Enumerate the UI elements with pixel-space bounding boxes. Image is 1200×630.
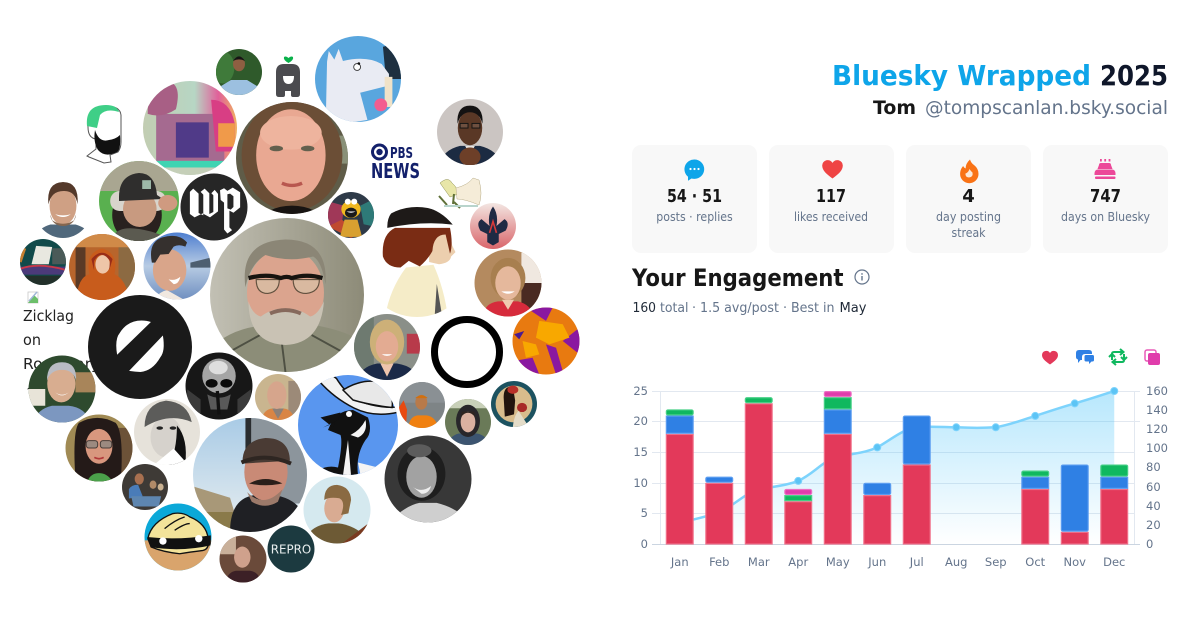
avatar: man with grey hair, black glasses and grey beard xyxy=(210,218,372,372)
avatar: bald man in dark sweater xyxy=(220,536,266,582)
engagement summary: · 1.5 avg/post · Best in xyxy=(692,300,834,316)
avatar: blonde woman in navy blazer xyxy=(354,314,420,380)
avatar: man with glasses and dark suit xyxy=(437,99,503,166)
avatar: black and white portrait with curly hair xyxy=(384,436,472,522)
avatar: black ring xyxy=(434,320,500,384)
icon: birthday cake xyxy=(1094,159,1116,179)
stat card: posting streak: streak xyxy=(952,226,986,240)
broken image alt text: Zicklag: on xyxy=(23,331,41,349)
avatar: black circle with white slash xyxy=(88,295,192,399)
month labels: Feb xyxy=(709,555,729,569)
engagement summary: 160 xyxy=(632,300,656,316)
month labels: Dec xyxy=(1103,555,1125,569)
avatar: men sitting with drinks xyxy=(122,464,168,510)
month labels xyxy=(670,555,1125,569)
engagement summary: total xyxy=(660,300,688,316)
avatar: PBS News logo xyxy=(371,144,420,183)
right axis labels: 80 xyxy=(1146,460,1161,474)
title: Bluesky Wrapped xyxy=(832,59,1091,92)
stat card: posting streak xyxy=(906,145,1031,253)
stat card: days on Bluesky: 747 xyxy=(1090,186,1121,207)
stat card: posts and replies xyxy=(632,145,757,253)
icon: quotes squares xyxy=(1145,350,1160,365)
stat card: posts and replies: 54 · 51 xyxy=(667,186,722,207)
avatar: bald man with beige background xyxy=(255,374,301,420)
avatar: young man in hood xyxy=(445,399,491,445)
avatar: woman with long brown hair xyxy=(236,102,348,214)
icon: info xyxy=(855,270,869,284)
icon: replies bubbles xyxy=(1076,350,1094,364)
avatar: art nouveau woman with red flower xyxy=(491,381,537,427)
avatar: thermal image xyxy=(512,308,580,374)
avatar: smiling man by a lake xyxy=(144,232,210,300)
engagement chart xyxy=(633,384,1168,569)
right axis labels: 160 xyxy=(1146,384,1168,398)
user name and handle: @tompscanlan.bsky.social xyxy=(925,97,1168,119)
month labels: May xyxy=(826,555,850,569)
avatar: Moomin character xyxy=(315,36,401,122)
avatar: Washington Post logo xyxy=(180,174,248,240)
month labels: Jul xyxy=(909,555,924,569)
avatar: grey ghost logo with green sprout xyxy=(276,56,300,97)
broken image alt text: Zicklag: ~ xyxy=(26,379,39,397)
left axis labels xyxy=(633,384,648,551)
avatar cluster xyxy=(20,36,580,582)
avatar: green haired bearded illustration xyxy=(87,105,121,163)
broken image alt text: Zicklag: Zicklag xyxy=(23,307,74,325)
left axis labels: 15 xyxy=(633,445,648,459)
right axis labels: 100 xyxy=(1146,441,1168,455)
left axis labels: 10 xyxy=(633,476,648,490)
avatar: circuit board wiring xyxy=(20,239,66,285)
month labels: Aug xyxy=(945,555,967,569)
month labels: Oct xyxy=(1025,555,1046,569)
month labels: Jun xyxy=(867,555,886,569)
avatar: PBS News logo: PBS xyxy=(390,144,413,162)
left axis labels: 5 xyxy=(641,506,648,520)
right axis labels xyxy=(1146,384,1168,551)
avatar: man in orange by stormy sky xyxy=(399,382,445,428)
avatar: goose in hat illustration xyxy=(298,375,398,475)
month labels: Jan xyxy=(670,555,689,569)
title: 2025 xyxy=(1100,59,1168,92)
avatar: silver skull xyxy=(186,352,252,420)
month labels: Apr xyxy=(788,555,808,569)
stat card: posting streak: day posting xyxy=(936,210,1001,224)
right axis labels: 60 xyxy=(1146,480,1161,494)
stat card: days on Bluesky: days on Bluesky xyxy=(1061,210,1150,224)
stacked bars xyxy=(666,392,1128,544)
icon: reposts arrows xyxy=(1109,349,1127,365)
stat card: likes received: 117 xyxy=(816,186,846,207)
left axis labels: 20 xyxy=(633,414,648,428)
heading: Your Engagement: Your Engagement xyxy=(631,264,844,292)
stat card: likes received: likes received xyxy=(794,210,868,224)
avatar: colorful cartoon bug xyxy=(328,192,374,238)
avatar: PBS News logo: NEWS xyxy=(371,159,420,183)
cumulative area xyxy=(680,391,1114,544)
avatar: black and white woman in beanie and glasses xyxy=(134,399,200,465)
right axis labels: 0 xyxy=(1146,537,1153,551)
icon: flame xyxy=(960,160,978,183)
avatar: illustrated red haired girl in orange hoodie xyxy=(69,234,135,300)
avatar: woman in black cap and headphones xyxy=(99,161,179,243)
left axis labels: 0 xyxy=(641,537,648,551)
avatar: woman with blonde bob and red jacket xyxy=(474,250,542,316)
avatar: older smiling man in plaid xyxy=(28,356,96,422)
month labels: Sep xyxy=(985,555,1007,569)
avatar: white lily flower xyxy=(439,178,481,208)
avatar: man with cap and mustache xyxy=(193,418,307,532)
left axis labels: 25 xyxy=(633,384,648,398)
icon: chat bubble xyxy=(684,159,704,181)
chart legend xyxy=(1042,349,1160,365)
right axis labels: 140 xyxy=(1146,403,1168,417)
avatar: woman with dark hair and glasses xyxy=(66,414,132,482)
right axis labels: 20 xyxy=(1146,518,1161,532)
icon: likes heart xyxy=(1042,351,1058,364)
broken image alt text: Zicklag: Rosemary xyxy=(23,355,100,373)
stat card: days on Bluesky xyxy=(1043,145,1168,253)
avatar: REPRO logo xyxy=(268,526,314,572)
avatar: REPRO logo: REPRO xyxy=(271,542,311,556)
stat card: posting streak: 4 xyxy=(962,186,975,207)
line points xyxy=(795,388,1118,484)
avatar: smiling man with stubble xyxy=(42,182,84,238)
stat card: likes received xyxy=(769,145,894,253)
avatar: cartoon clam with mask xyxy=(144,504,212,570)
month labels: Mar xyxy=(748,555,770,569)
right axis labels: 40 xyxy=(1146,499,1161,513)
avatar: fleur de lis xyxy=(470,203,516,249)
avatar: 3D character in black beret xyxy=(382,207,456,317)
engagement summary xyxy=(632,300,866,316)
avatar: person reflected in iridescent box xyxy=(143,81,237,177)
user name and handle: Tom xyxy=(873,97,916,119)
stat card: posts and replies: posts · replies xyxy=(656,210,733,224)
broken image alt text: Zicklag xyxy=(23,292,100,397)
cumulative line xyxy=(680,391,1114,523)
engagement summary: May xyxy=(840,300,866,316)
right axis labels: 120 xyxy=(1146,422,1168,436)
icon: heart xyxy=(822,160,843,178)
avatar: soldier woman with rifle xyxy=(304,476,370,545)
avatar: man in plaid shirt xyxy=(211,49,262,95)
month labels: Nov xyxy=(1064,555,1086,569)
